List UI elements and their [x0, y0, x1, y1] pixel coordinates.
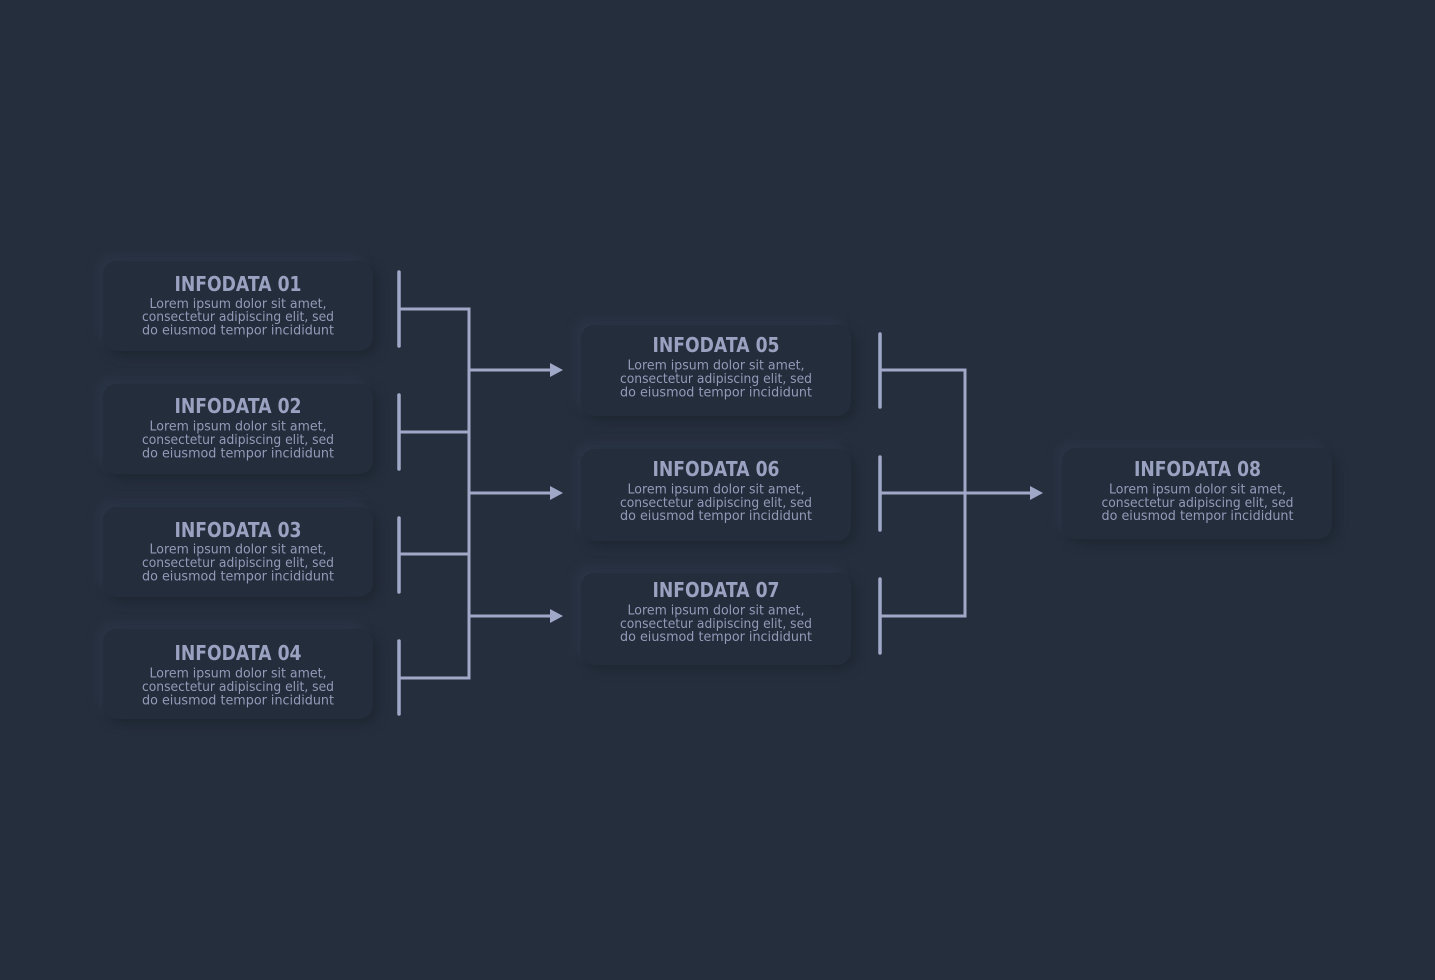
- card: infodata 06: Lorem ipsum dolor sit amet,: [628, 482, 804, 498]
- card: infodata 07: consectetur adipiscing elit, sed: [620, 616, 812, 632]
- card: infodata 01: consectetur adipiscing elit, sed: [142, 309, 334, 325]
- card: infodata 06: consectetur adipiscing elit, sed: [620, 495, 812, 511]
- card: infodata 08: do eiusmod tempor incididunt: [1102, 508, 1294, 524]
- card: infodata 01: [103, 261, 373, 351]
- card: infodata 01: INFODATA 01: [174, 272, 302, 296]
- card: infodata 06: INFODATA 06: [652, 457, 780, 481]
- card: infodata 02: [103, 384, 373, 474]
- card: infodata 04: [103, 629, 373, 719]
- card: infodata 04: do eiusmod tempor incididunt: [142, 692, 334, 708]
- card: infodata 07: do eiusmod tempor incididunt: [620, 629, 812, 645]
- card: infodata 05: Lorem ipsum dolor sit amet,: [628, 358, 804, 374]
- arrow: to card 07: [469, 609, 563, 623]
- card: infodata 01: Lorem ipsum dolor sit amet,: [150, 296, 326, 312]
- card: infodata 04: INFODATA 04: [174, 641, 302, 665]
- card: infodata 03: [103, 507, 373, 597]
- arrow: to card 06: [469, 486, 563, 500]
- card: infodata 05: INFODATA 05: [652, 333, 780, 357]
- card: infodata 02: INFODATA 02: [174, 394, 302, 418]
- card: infodata 02: Lorem ipsum dolor sit amet,: [150, 418, 326, 434]
- card: infodata 03: consectetur adipiscing elit, sed: [142, 555, 334, 571]
- card: infodata 02: do eiusmod tempor incididunt: [142, 446, 334, 462]
- card: infodata 06: do eiusmod tempor incididunt: [620, 508, 812, 524]
- card: infodata 05: do eiusmod tempor incididunt: [620, 384, 812, 400]
- card: infodata 08: INFODATA 08: [1134, 457, 1261, 481]
- card: infodata 04: Lorem ipsum dolor sit amet,: [150, 666, 326, 682]
- card: infodata 07: [581, 573, 851, 665]
- connector: cards 05-07 to card 08: [880, 334, 1043, 653]
- card: infodata 08: Lorem ipsum dolor sit amet,: [1109, 482, 1286, 498]
- card: infodata 01: do eiusmod tempor incididunt: [142, 322, 334, 338]
- card: infodata 03: Lorem ipsum dolor sit amet,: [150, 542, 326, 558]
- card: infodata 06: [581, 449, 851, 541]
- arrow: to card 05: [469, 363, 563, 377]
- card: infodata 08: consectetur adipiscing elit, sed: [1102, 495, 1294, 511]
- card: infodata 04: consectetur adipiscing elit, sed: [142, 679, 334, 695]
- card: infodata 03: INFODATA 03: [174, 518, 302, 542]
- card: infodata 07: Lorem ipsum dolor sit amet,: [628, 602, 804, 618]
- card: infodata 07: INFODATA 07: [652, 578, 780, 602]
- connector: cards 01-04 to cards 05-07: [399, 272, 563, 714]
- card: infodata 03: do eiusmod tempor incididunt: [142, 568, 334, 584]
- card: infodata 02: consectetur adipiscing elit, sed: [142, 432, 334, 448]
- arrow: to card 08: [965, 486, 1043, 500]
- card: infodata 05: [581, 325, 851, 416]
- card: infodata 08: [1062, 448, 1332, 539]
- card: infodata 05: consectetur adipiscing elit, sed: [620, 371, 812, 387]
